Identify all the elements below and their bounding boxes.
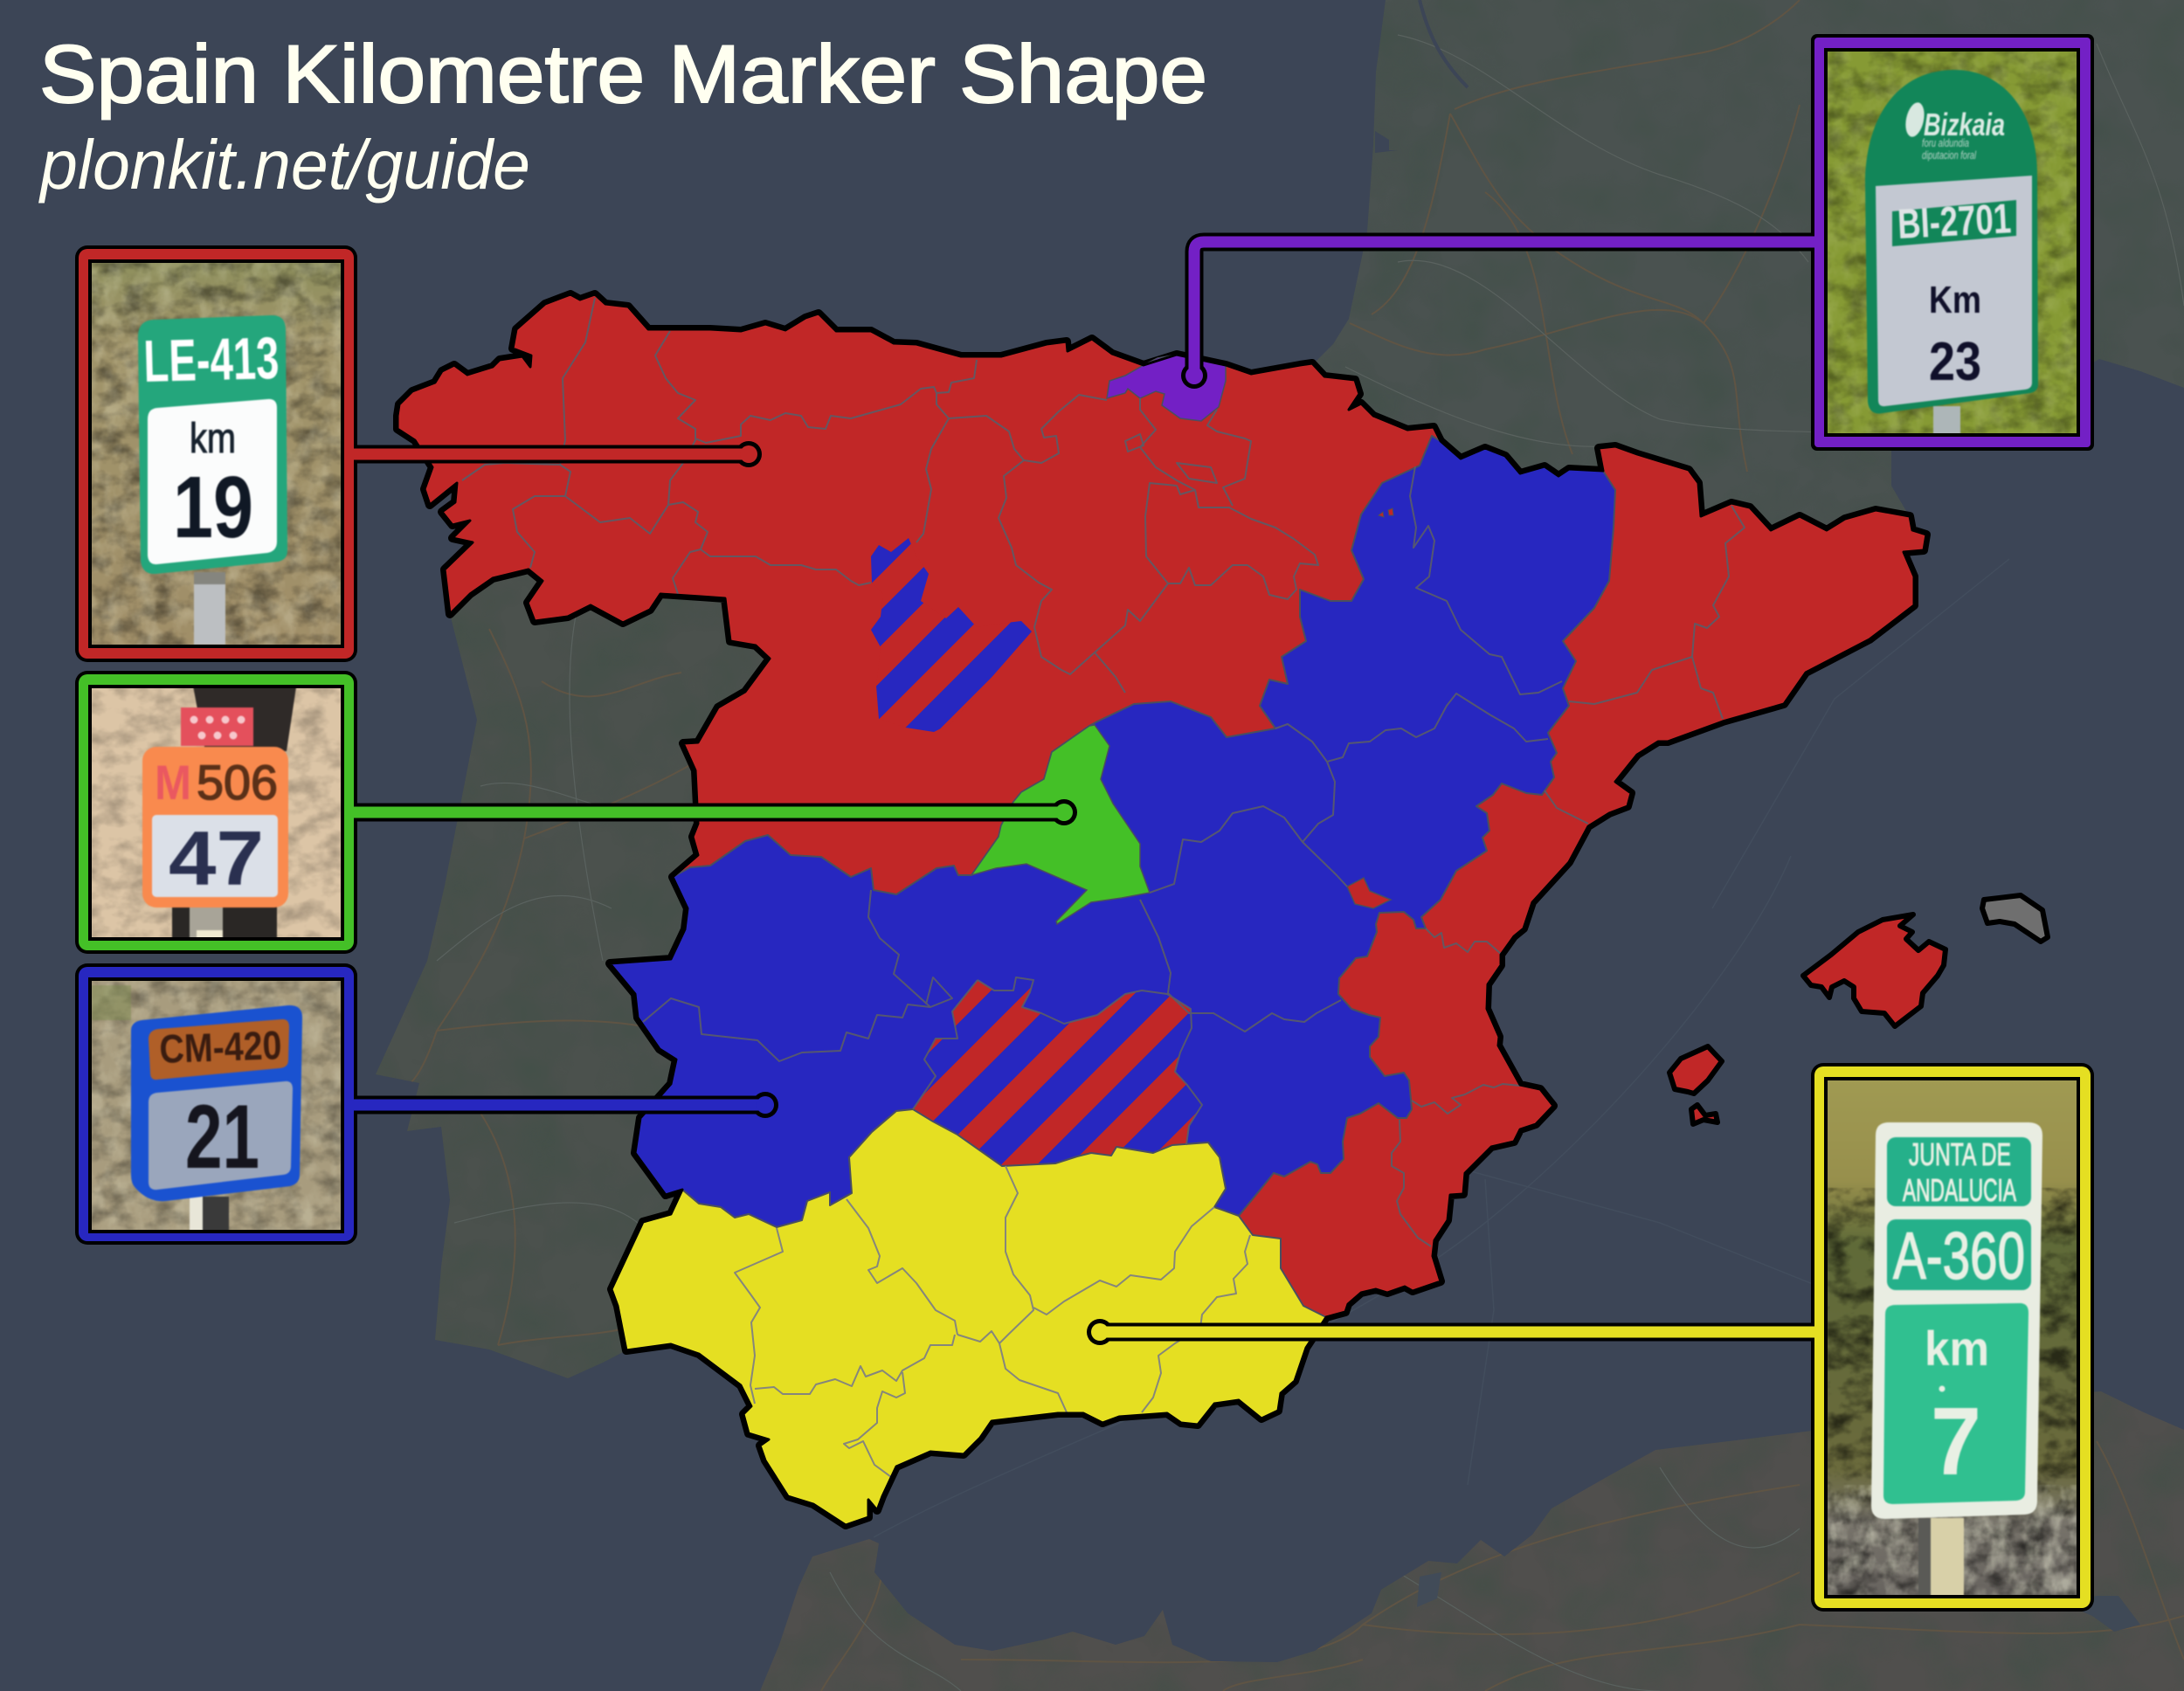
photo: M506 km 47 sign (87, 681, 345, 943)
photo: LE-413 km 19 sign: 19 (173, 459, 253, 556)
Formentera (1691, 1105, 1717, 1124)
photo: M506 km 47 sign: M (155, 755, 191, 810)
photo: LE-413 km 19 sign: LE-413 (142, 325, 280, 395)
blue regions: square blue-bordered markers (610, 436, 1615, 1227)
faint shipping lanes (874, 559, 2009, 1537)
striped province: mixed blue and red, north (871, 538, 1032, 732)
province borders, north and east (462, 298, 1745, 1246)
photo: CM-420 km 21 sign: CM-420 (159, 1022, 282, 1072)
title: Spain Kilometre Marker Shape (39, 28, 1207, 120)
photo: M506 km 47 sign: 47 (169, 815, 264, 901)
Spain coast and border outline (397, 294, 1926, 1525)
photo: Junta de Andalucia A-360 km 7 sign: A-360 (1893, 1219, 2025, 1294)
purple region: Bizkaia (1107, 355, 1226, 421)
photo: M506 km 47 sign: 506 (197, 755, 278, 810)
yellow region: Andalusia (612, 1109, 1326, 1525)
callout: purple Bizkaia dome marker (1181, 34, 2094, 451)
photo: Junta de Andalucia A-360 km 7 sign: 7 (1931, 1388, 1981, 1495)
coast line overlay (397, 294, 1926, 1525)
photo: Bizkaia BI-2701 km 23 sign: Bizkaia (1924, 107, 2005, 142)
green region: Madrid (971, 725, 1150, 924)
Menorca (1982, 895, 2048, 942)
Ibiza (1669, 1046, 1722, 1094)
callout: green Madrid marker M506 (75, 671, 1077, 954)
photo: Bizkaia BI-2701 km 23 sign: Km (1929, 279, 1981, 321)
Mallorca (1803, 915, 1946, 1026)
photo: Bizkaia BI-2701 km 23 sign: BI-2701 (1897, 196, 2012, 248)
photo: Junta de Andalucia A-360 km 7 sign (1823, 1076, 2081, 1599)
photo: LE-413 km 19 sign: km (190, 416, 236, 462)
photo: CM-420 km 21 sign (87, 977, 345, 1236)
photo: Junta de Andalucia A-360 km 7 sign: ANDALUCIA (1903, 1172, 2016, 1208)
red exclave inside blue (1347, 878, 1391, 908)
callout: yellow Andalucia marker A-360 (1087, 1063, 2094, 1612)
photo: Bizkaia BI-2701 km 23 sign: diputacion foral (1922, 148, 1977, 162)
photo: Junta de Andalucia A-360 km 7 sign: JUNTA DE (1909, 1136, 2011, 1172)
photo: Junta de Andalucia A-360 km 7 sign: km (1925, 1321, 1989, 1376)
tiny red enclave (1379, 508, 1393, 517)
photo: LE-413 km 19 sign (87, 259, 345, 649)
photo: Bizkaia BI-2701 km 23 sign (1823, 47, 2081, 438)
photo: CM-420 km 21 sign: 21 (185, 1087, 259, 1188)
photo: Bizkaia BI-2701 km 23 sign: 23 (1929, 332, 1981, 392)
red regions: rectangle km markers (397, 294, 1926, 1525)
subtitle: plonkit.net/guide (38, 126, 530, 204)
callout: red rectangle marker LE-413 (75, 245, 762, 662)
striped province: mixed blue and red, south (914, 980, 1198, 1165)
province borders, Andalusia (735, 1166, 1250, 1477)
photo: Bizkaia BI-2701 km 23 sign: foru aldundia (1922, 136, 1969, 149)
callout: blue square marker CM-420 (75, 963, 778, 1245)
Balearic Islands (1669, 895, 2048, 1124)
map of Spain by kilometre marker shape (397, 294, 2048, 1525)
